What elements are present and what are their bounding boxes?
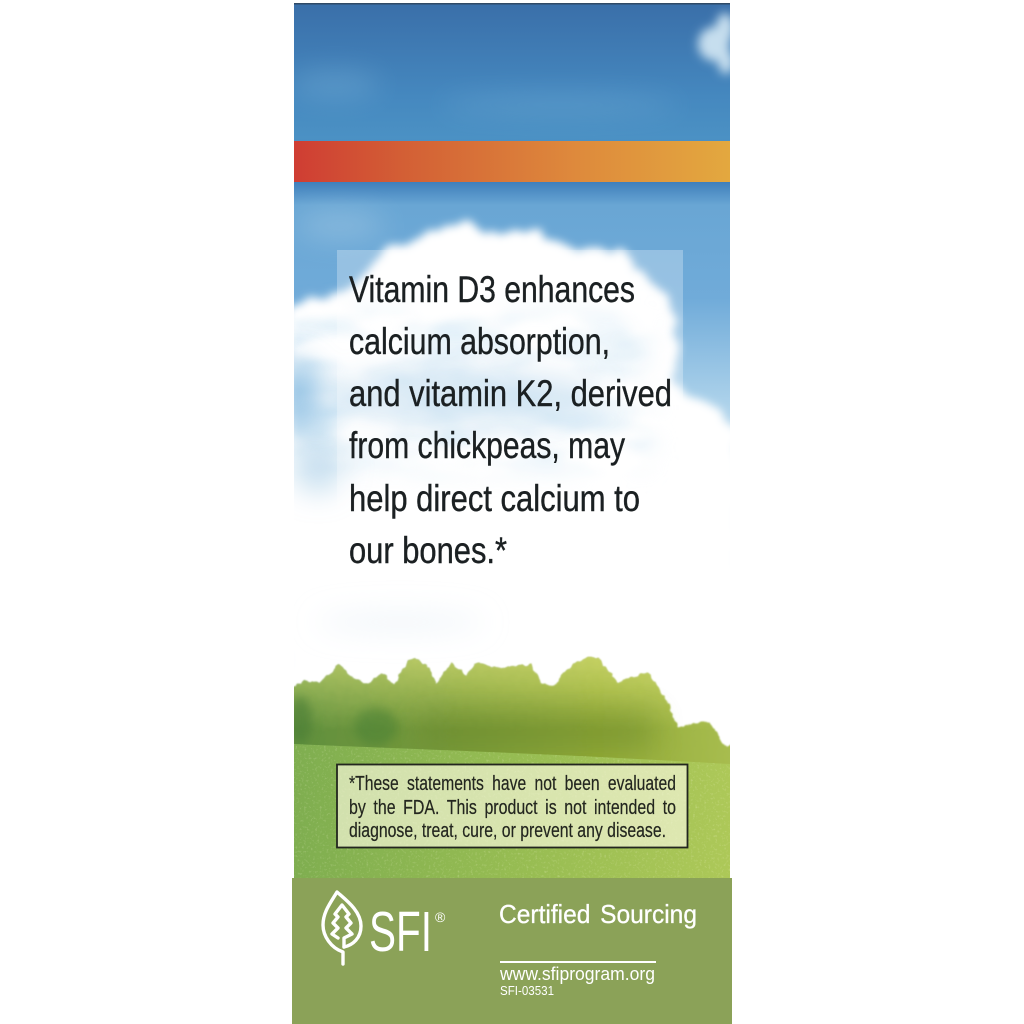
SFI wordmark: SFI	[369, 900, 432, 964]
FDA disclaimer box: by the FDA. This product is not intended to	[349, 797, 676, 819]
icon: SFI leaf and tree logo	[323, 892, 361, 964]
large cumulus cloud	[285, 218, 740, 720]
FDA disclaimer box	[337, 764, 688, 848]
website: www.sfiprogram.org	[499, 964, 655, 984]
main text block: Vitamin D3 enhances	[349, 269, 635, 310]
main text block: calcium absorption,	[349, 321, 610, 362]
gradient band	[294, 141, 730, 182]
main text block: help direct calcium to	[349, 478, 640, 519]
main text block: from chickpeas, may	[349, 425, 625, 466]
certificate code: SFI-03531	[500, 983, 554, 998]
panel: sky background	[272, 4, 740, 884]
FDA disclaimer box: diagnose, treat, cure, or prevent any disease.	[349, 820, 666, 842]
FDA disclaimer box: *These statements have not been evaluated	[349, 773, 676, 795]
translucent text panel	[337, 250, 683, 590]
certified sourcing heading: Certified Sourcing	[499, 899, 697, 929]
main text block	[349, 269, 672, 571]
panel: SFI green footer	[292, 878, 732, 1024]
faint cirrus streaks	[290, 71, 680, 239]
main text block: and vitamin K2, derived	[349, 373, 672, 414]
top edge	[294, 3, 730, 4]
tree line	[288, 658, 735, 770]
top-right cloud	[698, 13, 734, 74]
grass field	[294, 740, 730, 884]
registered mark: ®	[435, 909, 446, 925]
blue mottling inside cloud	[294, 312, 653, 474]
divider	[500, 961, 656, 963]
main text block: our bones.*	[349, 530, 507, 571]
blue hollows inside cloud	[294, 346, 600, 504]
